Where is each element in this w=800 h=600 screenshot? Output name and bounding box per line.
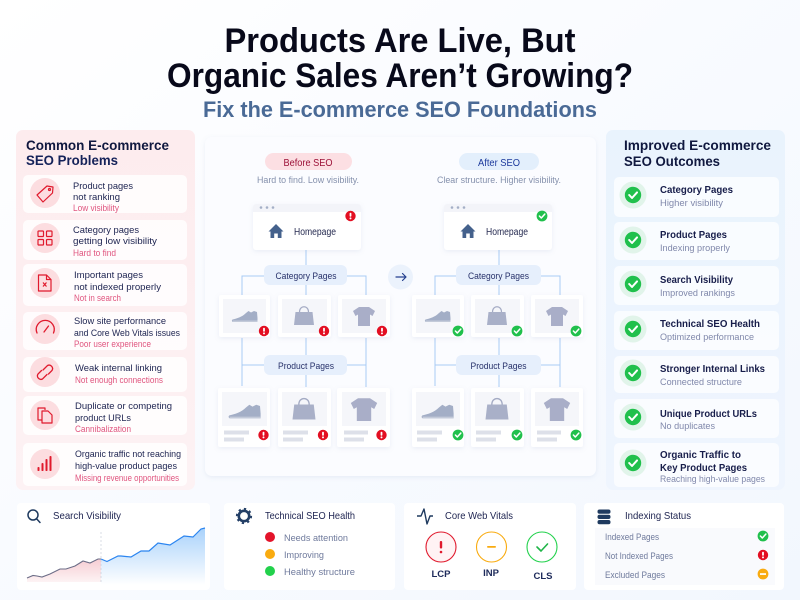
problem: weak linking: Weak internal linking [75,363,162,374]
status rows [595,528,775,585]
panel: core web vitals [404,503,576,590]
problem: duplicate URLs: Cannibalization [75,424,131,434]
outcome: unique URLs [614,399,779,438]
outcome: organic traffic: Reaching high-value pages [660,474,765,485]
outcome: technical health [614,311,779,350]
problem: slow site: and Core Web Vitals issues [74,328,180,339]
problem: slow site: Slow site performance [74,316,166,327]
badge: before SEO: Before SEO [284,158,333,169]
problem: weak linking: Not enough connections [75,375,163,385]
outcome: category pages: Higher visibility [660,198,723,209]
heading: outcomes [624,137,771,169]
status rows: Excluded Pages [605,570,665,581]
problem: duplicate URLs: product URLs [75,413,131,424]
homepage card: after: Homepage [486,227,528,238]
gauge: INP [476,532,506,579]
homepage card: after [444,204,552,250]
outcome: unique URLs: Unique Product URLs [660,408,757,420]
outcome: internal links: Connected structure [660,377,742,388]
pill: category pages after [456,265,541,285]
category thumbnails: after [412,295,583,337]
problem: category pages: getting low visibility [73,236,157,247]
problem: organic traffic: Organic traffic not reaching [75,449,181,460]
problem: organic traffic: Missing revenue opportunities [75,473,179,483]
legend: Healthy structure [284,567,355,578]
gauge: LCP: LCP [432,569,451,580]
icon: magnifier [28,510,40,522]
outcome: search visibility [614,266,779,305]
after column [412,153,583,447]
panel: search visibility [17,503,210,590]
problem: not indexed: Important pages [74,270,143,281]
outcome: internal links: Stronger Internal Links [660,363,765,375]
icon: pulse [417,509,433,524]
product cards: before [218,388,390,447]
heading: problems [26,137,169,168]
panel: common problems [16,130,195,490]
pill: product pages: Product Pages [278,361,334,372]
product cards: after [412,388,583,447]
connectors: after [435,250,560,387]
problem: category pages: Category pages [73,225,139,236]
caption: before: Hard to find. Low visibility. [257,175,359,185]
heading: outcomes: Improved E-commerce [624,137,771,153]
problem: duplicate URLs: Duplicate or competing [75,401,172,412]
label: technical SEO health: Technical SEO Health [265,510,355,522]
problem: duplicate URLs [23,396,187,435]
problem: not indexed: not indexed properly [74,282,161,293]
problem: category pages [23,220,187,260]
pill: category pages after: Category Pages [468,271,529,282]
homepage card: before [253,204,361,250]
panel: technical SEO health [224,503,395,590]
problem: weak linking [23,357,187,392]
outcome: product pages: Indexing properly [660,243,730,254]
panel: indexing status [584,503,784,590]
legend: Improving [284,550,324,561]
gauge: INP: INP [483,568,500,579]
outcome: product pages [614,222,779,260]
status rows: Not Indexed Pages [605,551,673,562]
before column [218,153,390,447]
problem: organic traffic: high-value product pages [75,461,177,472]
problem: slow site [23,312,187,350]
problem: category pages: Hard to find [73,248,116,258]
problem: product pages: not ranking [73,192,120,203]
outcome: search visibility: Search Visibility [660,274,733,286]
label: indexing status: Indexing Status [625,510,691,522]
pill: product pages after [456,355,541,375]
subtitle: Fix the E-commerce SEO Foundations [203,97,597,122]
status rows: Indexed Pages [605,532,659,543]
outcome: organic traffic: Key Product Pages [660,462,747,474]
legend [265,532,355,578]
line chart [27,528,205,585]
outcome: category pages [614,177,779,217]
outcome: unique URLs: No duplicates [660,421,715,432]
outcome: technical health: Optimized performance [660,332,754,343]
label: core web vitals: Core Web Vitals [445,510,513,522]
title: Products Are Live, But [224,22,576,60]
badge: after SEO: After SEO [478,158,520,169]
heading: problems: SEO Problems [26,152,118,168]
arrow: before to after [388,264,413,290]
problem: product pages: Low visibility [73,203,119,213]
caption: after: Clear structure. Higher visibility. [437,175,561,185]
problem: not indexed: Not in search [74,293,121,303]
outcome: organic traffic [614,443,779,487]
outcome: search visibility: Improved rankings [660,288,735,299]
problem: not indexed [23,264,187,306]
panel: before and after site structure [205,137,596,476]
outcome: organic traffic: Organic Traffic to [660,449,741,461]
homepage card: before: Homepage [294,227,336,238]
outcome: internal links [614,356,779,393]
outcome: technical health: Technical SEO Health [660,318,760,330]
outcome: product pages: Product Pages [660,229,727,241]
badge: before SEO [265,153,352,170]
pill: category pages [264,265,347,285]
problem: product pages [23,175,187,213]
pill: category pages: Category Pages [276,271,337,282]
heading: outcomes: SEO Outcomes [624,153,720,169]
pill: product pages [264,355,347,375]
badge: after SEO [459,153,539,170]
legend: Needs attention [284,533,348,544]
connectors: before [242,250,366,387]
label: search visibility: Search Visibility [53,510,122,522]
title: Organic Sales Aren’t Growing? [167,57,633,95]
problem: slow site: Poor user experience [74,339,151,349]
gauge: CLS: CLS [534,571,552,582]
problem: product pages: Product pages [73,181,133,192]
icon: database [598,510,610,524]
pill: product pages after: Product Pages [470,361,527,372]
heading: problems: Common E-commerce [26,137,169,153]
title [167,22,633,95]
icon: gear [237,509,251,523]
outcome: category pages: Category Pages [660,184,733,196]
panel: improved outcomes [606,130,785,490]
problem: organic traffic [23,443,187,486]
gauge: LCP [426,532,456,580]
gauge: CLS [527,532,557,582]
category thumbnails: before [219,295,390,337]
